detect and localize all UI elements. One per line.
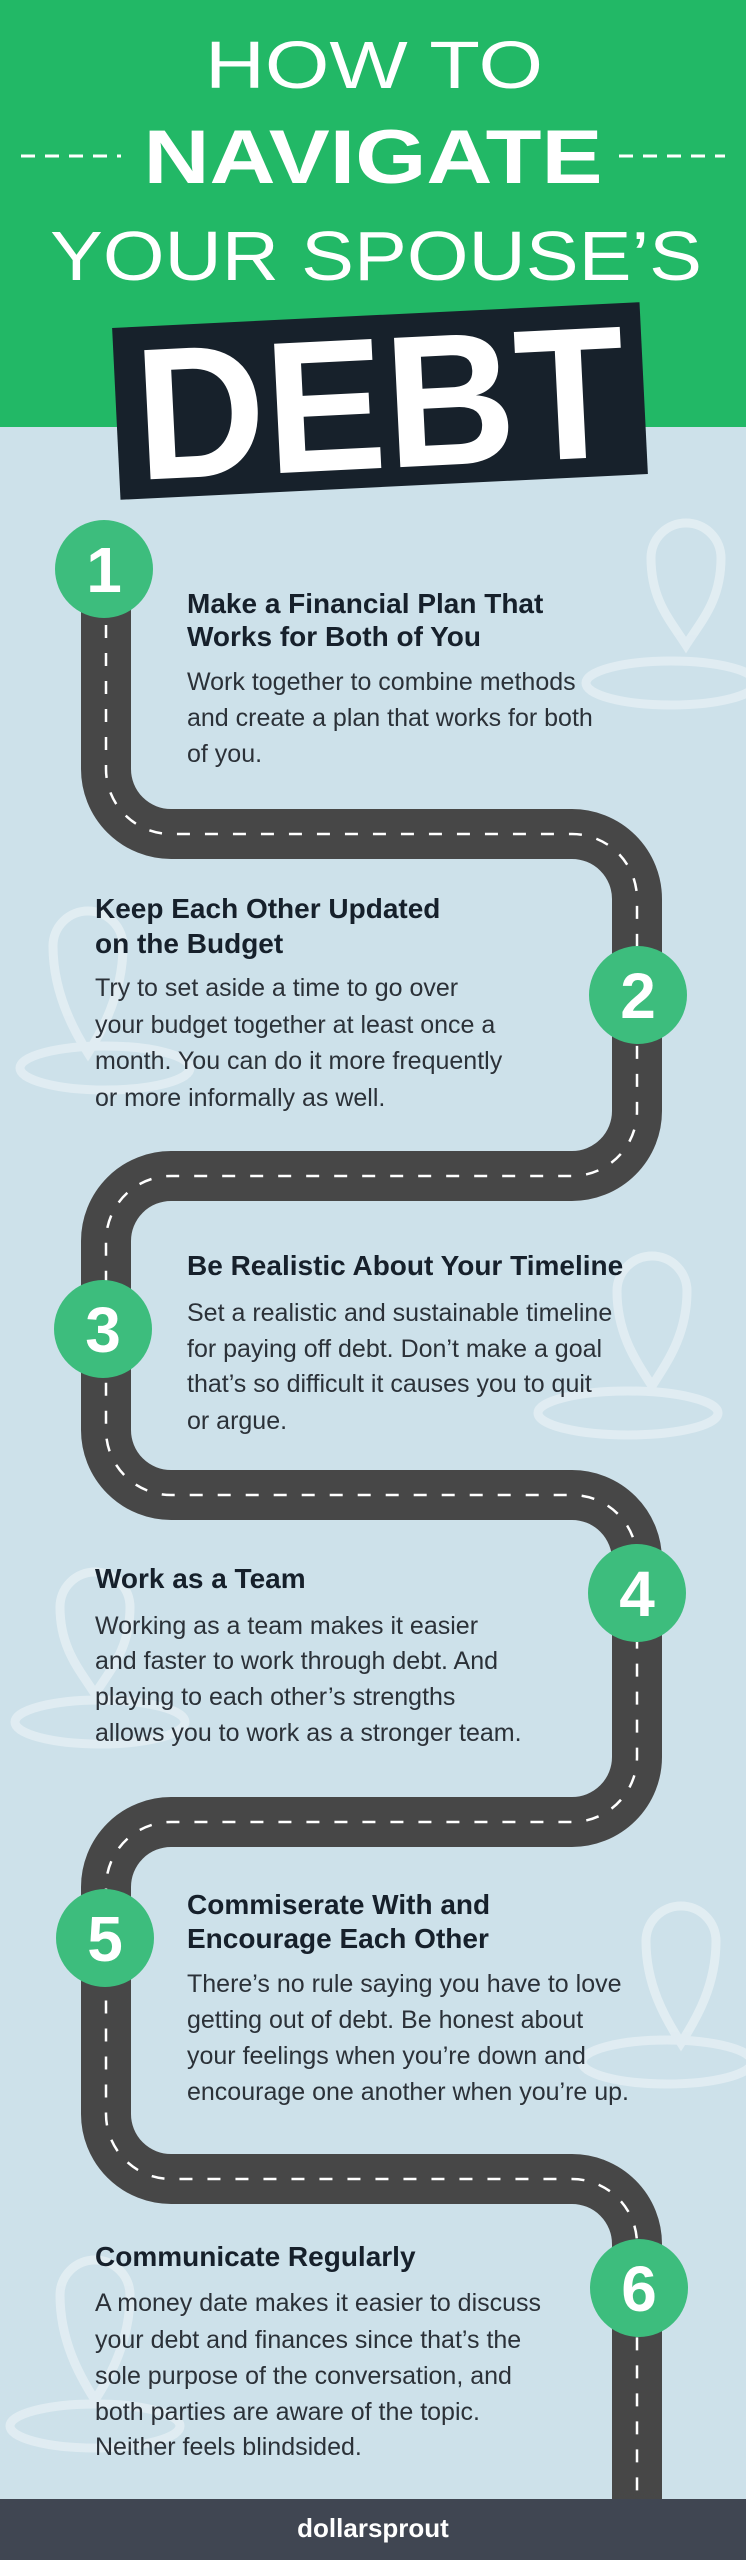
step 2 text: month. You can do it more frequently <box>95 1047 503 1075</box>
step 1 text: Make a Financial Plan That <box>187 588 543 619</box>
step 2 marker: 2 <box>620 960 656 1032</box>
step 5 text: your feelings when you’re down and <box>187 2042 586 2070</box>
step 6 text <box>95 2241 541 2461</box>
step 2 text: or more informally as well. <box>95 1084 385 1112</box>
step 4 text: playing to each other’s strengths <box>95 1683 455 1711</box>
step 5 text: Encourage Each Other <box>187 1923 489 1954</box>
step 6 text: Communicate Regularly <box>95 2241 416 2272</box>
step 3 text: Be Realistic About Your Timeline <box>187 1250 623 1281</box>
header: green banner <box>0 0 746 427</box>
step 6 text: sole purpose of the conversation, and <box>95 2362 512 2390</box>
decorative location pins <box>10 523 746 2448</box>
step 2 marker <box>589 946 687 1044</box>
step 4 text: Work as a Team <box>95 1563 306 1594</box>
step 4 text: Working as a team makes it easier <box>95 1612 478 1640</box>
step 3 text: that’s so difficult it causes you to quit <box>187 1370 592 1398</box>
step 4 marker <box>588 1544 686 1642</box>
step 1 marker: 1 <box>86 534 122 606</box>
title line: NAVIGATE with dashes: NAVIGATE <box>144 115 602 200</box>
step 3 text: or argue. <box>187 1407 287 1435</box>
step 3 marker <box>54 1280 152 1378</box>
step 3 text <box>187 1250 623 1435</box>
step 2 text <box>95 893 503 1112</box>
step 5 marker: 5 <box>87 1903 123 1975</box>
step 6 text: both parties are aware of the topic. <box>95 2398 480 2426</box>
step 1 text: Works for Both of You <box>187 621 481 652</box>
title line: HOW TO: HOW TO <box>205 28 543 103</box>
title: DEBT box: DEBT <box>130 286 630 520</box>
step 1 text <box>187 588 593 768</box>
step 3 text: Set a realistic and sustainable timeline <box>187 1299 612 1327</box>
step 1 text: and create a plan that works for both <box>187 704 593 732</box>
step 2 text: Try to set aside a time to go over <box>95 974 458 1002</box>
step 5 text: getting out of debt. Be honest about <box>187 2006 583 2034</box>
step 6 text: A money date makes it easier to discuss <box>95 2289 541 2317</box>
step 6 text: Neither feels blindsided. <box>95 2433 362 2461</box>
winding road <box>106 569 637 2510</box>
step 4 text: and faster to work through debt. And <box>95 1647 498 1675</box>
step 6 marker <box>590 2239 688 2337</box>
step 3 text: for paying off debt. Don’t make a goal <box>187 1335 602 1363</box>
step 4 text <box>95 1563 522 1747</box>
step 3 marker: 3 <box>85 1294 121 1366</box>
step 2 text: Keep Each Other Updated <box>95 893 440 924</box>
step 5 text <box>187 1889 629 2106</box>
step 2 text: your budget together at least once a <box>95 1011 495 1039</box>
footer with logo <box>0 2499 746 2560</box>
step 6 marker: 6 <box>621 2253 657 2325</box>
step 5 text: encourage one another when you’re up. <box>187 2078 629 2106</box>
footer with logo: dollarsprout <box>297 2513 449 2543</box>
step 5 text: There’s no rule saying you have to love <box>187 1970 622 1998</box>
step 1 text: Work together to combine methods <box>187 668 576 696</box>
step 1 text: of you. <box>187 740 262 768</box>
step 1 marker <box>55 520 153 618</box>
step 5 marker <box>56 1889 154 1987</box>
step 2 text: on the Budget <box>95 928 283 959</box>
step 4 text: allows you to work as a stronger team. <box>95 1719 522 1747</box>
step 4 marker: 4 <box>619 1558 655 1630</box>
step 6 text: your debt and finances since that’s the <box>95 2326 521 2354</box>
step 5 text: Commiserate With and <box>187 1889 490 1920</box>
title line: YOUR SPOUSE'S: YOUR SPOUSE’S <box>50 217 702 295</box>
